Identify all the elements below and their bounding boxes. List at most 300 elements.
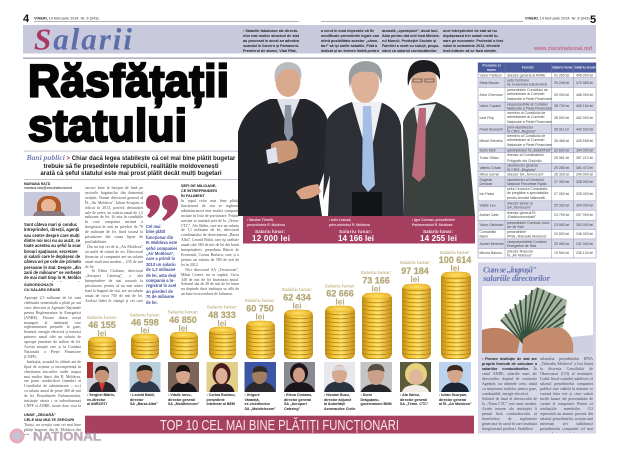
band teaser column 3: această „operațiune", două luni. bbox=[382, 29, 438, 33]
pull quote text: Cel mai bbox=[146, 224, 161, 229]
caption 3: • Vitalie Iurcu, bbox=[168, 393, 192, 397]
salary table: Naționale a Pieței Financiare bbox=[507, 143, 552, 147]
salary 46 155: 46 155 bbox=[88, 320, 116, 330]
salary 73 166: lei bbox=[372, 284, 380, 294]
salary 62 666 bbox=[325, 284, 356, 306]
salary 62 434: 62 434 bbox=[283, 292, 311, 302]
salary table: ÎS CRIS „Registru" bbox=[506, 130, 537, 134]
caption 2: SA „Barza Albă" bbox=[130, 402, 158, 406]
salary 73 166 bbox=[361, 270, 392, 294]
intro paragraph bbox=[24, 222, 81, 282]
date line left: VINERI, 14 februarie 2014. Nr. 6 (043) bbox=[34, 16, 99, 20]
panel: how salaries are fattened bbox=[478, 262, 596, 434]
portrait captions bbox=[87, 393, 472, 411]
deck: public money subhead bbox=[26, 153, 236, 177]
panel heading: salariile directorilor bbox=[482, 273, 551, 283]
salary 46 155: lei bbox=[98, 329, 106, 338]
salary table: vicepreședinte al Comisiei bbox=[507, 102, 548, 106]
salary table: Tudor Giltan bbox=[480, 156, 499, 160]
main title bbox=[28, 56, 229, 151]
pull quote text: R. Moldova este bbox=[146, 240, 177, 245]
salary 48 333: Salariu lunar: bbox=[207, 304, 238, 310]
crimson band with three leader salaries: • Iurie Leancă, bbox=[329, 218, 351, 222]
crimson band with three leader salaries: • Igor Corman, președintele bbox=[412, 218, 455, 222]
salary table: Salariu lunar bbox=[552, 66, 573, 70]
salary 46 598: Salariu lunar: bbox=[130, 312, 161, 318]
band teaser column 1: scandal în Guvern și Parlament. bbox=[243, 44, 299, 48]
salary table: Denizan bbox=[480, 182, 492, 186]
salary table: administrator ÎS „MoldATSA" bbox=[507, 149, 552, 153]
salary table: de pregătire a specialiștilor bbox=[507, 191, 549, 195]
band teaser column 2 bbox=[321, 29, 379, 53]
salary table: șefa Centrului bbox=[507, 78, 529, 82]
salary table: 465 164 lei bbox=[576, 104, 593, 108]
salary table: ice de Stat bbox=[507, 225, 524, 229]
salary table: vicedirector general bbox=[507, 164, 538, 168]
subhead: millionaire bosses: ÎN FALIMENT bbox=[181, 194, 205, 198]
caption 10: al ÎS „Air Moldova" bbox=[439, 402, 471, 406]
crimson band with three leader salaries bbox=[243, 216, 475, 244]
deck: public money subhead: Bani publici > Chiar dacă legea stabilește că cel mai bine plătit bugetar bbox=[27, 153, 235, 162]
portrait 8 bbox=[360, 362, 392, 392]
salary table: administrare al Comisiei bbox=[507, 138, 545, 142]
subhead: subordinates: CU SALARII GRASE bbox=[24, 288, 60, 292]
intro paragraph: Sunt câteva mari și conduc bbox=[24, 222, 77, 227]
salary 46 598 bbox=[130, 312, 161, 335]
salary table: 297 000 lei bbox=[576, 213, 593, 217]
salary table: 425 598 lei bbox=[576, 139, 593, 143]
band teaser column 2: modificate prevederile legale care bbox=[321, 34, 379, 38]
salary table: Naționale a Pieței Financiare bbox=[507, 97, 552, 101]
salary table: Sorin Stoli bbox=[480, 149, 496, 153]
coin stacks bbox=[88, 272, 471, 359]
portrait 6 bbox=[284, 362, 315, 392]
caption 5: Varaniță, bbox=[244, 398, 259, 402]
salary 46 155: Salariu lunar: bbox=[87, 315, 118, 321]
salary table: pentru Armata Națională bbox=[507, 196, 545, 200]
portrait 2 bbox=[130, 362, 160, 392]
salary table: Ion Pasla bbox=[480, 192, 494, 196]
salary table: Salariu anual bbox=[574, 66, 596, 70]
intro paragraph: birouri spațioase, secretare bbox=[24, 249, 77, 254]
salary table: director financiar bbox=[507, 249, 534, 253]
salary table: 394 000 lei bbox=[576, 149, 593, 153]
salary 46 598: 46 598 bbox=[131, 318, 159, 328]
page number left: 4 bbox=[23, 13, 30, 25]
salary table: 328 000 lei bbox=[576, 180, 593, 184]
pull quote text: funcționar din bbox=[146, 235, 173, 240]
bottom banner: TOP 10 CEL MAI BINE PLĂTIȚI FUNCȚIONARI bbox=[160, 417, 399, 434]
salary 62 666: lei bbox=[336, 298, 344, 306]
panel text column 1: • Fiecare instituție de stat are propria formulă de calculare a salariilor conducătorilor. În cazul ANRE, salariile mari ale directorilor depind de veniturile Agenției, iar ultimele cresc odată cu majorarea tarifelor pentru gaze, combustibil, energie electrică. bbox=[482, 356, 537, 396]
salary table: membru al Consiliului de bbox=[507, 134, 545, 138]
salary 62 434 bbox=[282, 287, 313, 310]
coin stack 1 bbox=[88, 336, 116, 359]
salary 100 614: Salariu lunar: bbox=[440, 250, 471, 256]
subhead: subordinates: SUBORDONAȚII bbox=[24, 283, 53, 287]
portrait 9 bbox=[400, 362, 431, 392]
caption 1: • Serghei Bătrîn, bbox=[87, 393, 115, 397]
salary table: 19 594 lei bbox=[554, 251, 569, 255]
crimson band with three leader salaries: 14 166 lei bbox=[338, 234, 374, 243]
caption 6: SA „Aeroport bbox=[284, 402, 307, 406]
salary 62 666: Salariu lunar: bbox=[325, 284, 356, 290]
salary 62 434: Salariu lunar: bbox=[282, 287, 313, 293]
salary 100 614: 100 614 bbox=[439, 255, 471, 265]
crimson band with three leader salaries: prim-ministrul R. Moldova bbox=[329, 223, 370, 227]
caption 5 bbox=[244, 393, 276, 411]
salary 60 750 bbox=[245, 298, 276, 322]
salary table: vicedirector al Centrului bbox=[507, 178, 544, 182]
crimson band with three leader salaries: Salariu lunar: bbox=[339, 229, 372, 234]
pull quote text: compania a în- bbox=[146, 278, 175, 283]
crimson band with three leader salaries: 14 255 lei bbox=[420, 234, 457, 243]
coin stack 8 bbox=[362, 292, 392, 359]
caption 9: • Ala Sârbu, bbox=[400, 393, 420, 397]
caption 4: Interimar al BEM bbox=[206, 402, 235, 406]
caption 10 bbox=[439, 393, 472, 406]
salary 46 850: Salariu lunar: bbox=[168, 310, 199, 316]
coin stack 9 bbox=[402, 284, 431, 359]
caption 5: • Grigore bbox=[244, 393, 260, 397]
panel heading: Cum se „îngrașă" bbox=[483, 264, 537, 274]
pull quote text: „Air Moldova", bbox=[146, 251, 175, 256]
salary table: Naționale a Pieței Financiare bbox=[507, 106, 552, 110]
coin stack 10 bbox=[441, 272, 471, 359]
pull quote text: bine plătit bbox=[146, 229, 165, 234]
salary 97 184 bbox=[400, 260, 431, 284]
salary 48 333 bbox=[207, 304, 238, 328]
salary table: 283 000 lei bbox=[576, 223, 593, 227]
caption 6 bbox=[284, 393, 312, 411]
coin stack 5 bbox=[246, 320, 275, 359]
salary table: ÎS CRIS „Registru" bbox=[506, 168, 537, 172]
portrait 1 bbox=[87, 362, 118, 392]
salary table: director general ÎS bbox=[507, 211, 536, 215]
photo: three state leaders bbox=[238, 60, 475, 216]
salary table: Stela Mocan bbox=[480, 81, 499, 85]
section name Salarii: Salarii bbox=[34, 22, 132, 56]
salary 100 614 bbox=[439, 250, 471, 273]
caption 8: • Dorin bbox=[360, 393, 372, 397]
salary 46 850: 46 850 bbox=[169, 315, 197, 325]
salary table: președintele Consiliului de bbox=[507, 88, 548, 92]
band teaser column 3: Familiei a venit cu soluții, propu- bbox=[382, 44, 439, 48]
salary table: 241 000 lei bbox=[576, 242, 593, 246]
salary 46 850 bbox=[168, 310, 199, 333]
band teaser column 4: depășească trei salarii medii lu- bbox=[443, 34, 499, 38]
salary table: Victor Parlicov bbox=[480, 73, 502, 77]
salary table: director SA „Termocom" bbox=[507, 173, 545, 177]
intro paragraph: dintre noi nici nu au auzit, ce bbox=[24, 238, 80, 243]
salary table: 351 473 lei bbox=[576, 166, 593, 170]
deck: public money subhead: trebuie să fie președintele republicii, realitățile moldovenești bbox=[43, 162, 219, 170]
subhead: where it flies: UNDE „ZBOARĂ" bbox=[24, 413, 56, 417]
caption 2: director bbox=[130, 398, 143, 402]
caption 4: • Corina Burlacu, bbox=[206, 393, 236, 397]
pull quote text: de lei. bbox=[146, 300, 158, 305]
band teaser column 2: oferă posibilitate acestor „cămo- bbox=[321, 39, 378, 43]
crimson band with three leader salaries: • Nicolae Timofti, bbox=[247, 218, 274, 222]
salary 62 666: 62 666 bbox=[326, 288, 354, 298]
salary table: administrare al Comisiei bbox=[507, 92, 545, 96]
salary 97 184: 97 184 bbox=[401, 266, 429, 276]
caption 7 bbox=[324, 393, 356, 411]
band teaser column 2: indicat și un termen limită pentru bbox=[321, 49, 379, 53]
pull quote text: șeful companiei bbox=[146, 246, 177, 251]
watermark logo bbox=[10, 428, 101, 444]
salary table: președintele Comisiei Jurid- bbox=[507, 221, 551, 225]
salary table: Artur Gherman bbox=[480, 93, 503, 97]
pull quote text: care a primit în bbox=[146, 256, 175, 261]
main title: statului bbox=[28, 100, 187, 151]
caption 7: • Nicolae Buzu, bbox=[324, 393, 350, 397]
salary table: 27 400 lei bbox=[554, 180, 569, 184]
band teaser column 3: nând ca salariul conducătorilor bbox=[382, 49, 437, 53]
salary 60 750: Salariu lunar: bbox=[245, 298, 276, 304]
band teaser column 3 bbox=[382, 29, 440, 53]
salary table: 39 248 lei bbox=[554, 81, 569, 85]
subhead: where it flies: CELE MAI MULTE ZEROURI bbox=[24, 418, 74, 422]
salary table: 340 000 lei bbox=[576, 173, 593, 177]
crimson band with three leader salaries: președintele R. Moldova bbox=[247, 223, 285, 227]
body text column 3: În topul celor mai bine plătiți funcționari de stat se regăsesc administratorii mai multor companii incluse în lista de privatizare. Printre acestea se numără șefa de la „Teton-CTC", Ala Sârbu, care are un salariu de 1,1 milioane de lei, directorul combinatului de divertisment „Barza Albă", Leonid Babii, care îşi atribuie anual câte 560 de mii de lei din banii întreprinderii, președinta Băncii de Economii, Corina Burlacu, care și a permis un salariu de 580 de mii de lei în 2012. bbox=[181, 199, 239, 267]
salary table: director tehnic al bbox=[507, 202, 533, 206]
caption 9 bbox=[400, 393, 428, 406]
portrait 3 bbox=[168, 362, 199, 392]
coin stack 4 bbox=[209, 326, 236, 359]
body text column 1 bbox=[24, 296, 81, 407]
salary table: Energetice de Stat bbox=[507, 244, 536, 248]
panel heading bbox=[482, 264, 551, 283]
salary table: Mihai Cernei bbox=[480, 173, 499, 177]
body text column 1: Aproape 2,5 milioane de lei sunt cheltuiala semestrială a plătit pe ani cinci directori ai Agenției Naționale pentru Reglementare în Energetică (ANRE). Fiecare dintre acești manageri al instituției care reglementează prețurile la gaze, benzină, energie electrică și termică primesc anual câte un salariu de aproape jumătate de milion de lei. Acesta situație este și la Comisia Națională a Pieței Financiare (CNPF). bbox=[24, 296, 81, 359]
salary table: Naționale a Pieței Financiare bbox=[507, 120, 552, 124]
salary 97 184: lei bbox=[411, 275, 419, 284]
caption 8 bbox=[360, 393, 392, 406]
subhead: millionaire bosses bbox=[180, 184, 217, 198]
author portrait bbox=[24, 192, 80, 216]
salary table: Național Frecvențe Radio bbox=[507, 182, 547, 186]
salary table: 20 083 lei bbox=[554, 242, 569, 246]
caption 9: SA „Teton- CTC" bbox=[400, 402, 428, 406]
salary table: Prenume și bbox=[482, 64, 501, 68]
salary table: Constantin bbox=[480, 230, 496, 234]
person: Nicolae Timofti bbox=[238, 62, 332, 216]
salary 73 166: Salariu lunar: bbox=[361, 270, 392, 276]
intro paragraph: și salarii care le depășesc de bbox=[24, 254, 80, 259]
salary table: 357 212 lei bbox=[576, 156, 593, 160]
salary table: 20 500 lei bbox=[554, 232, 569, 236]
caption 6: director general bbox=[284, 398, 311, 402]
subhead: millionaire bosses: CE ÎNTREPRINDERI bbox=[181, 189, 217, 193]
salary table: 462 000 lei bbox=[576, 116, 593, 120]
portrait 10 bbox=[439, 362, 471, 392]
salary 48 333: lei bbox=[218, 319, 226, 328]
salary table: 39 000 lei bbox=[554, 93, 569, 97]
intro paragraph: sau centre despre care mulți bbox=[24, 233, 80, 238]
salary table: SA „Termocom" bbox=[507, 206, 532, 210]
salary table: administrare al Comisiei bbox=[507, 115, 545, 119]
band teaser column 1: • Salariile fabuloase ale directo- bbox=[243, 29, 298, 33]
salary table: Iurie Filip bbox=[480, 116, 494, 120]
salary table: de Guvernare Electronică bbox=[507, 83, 547, 87]
salary table: 442 932 lei bbox=[576, 128, 593, 132]
salary table: 23 583 lei bbox=[554, 223, 569, 227]
salary 62 434: lei bbox=[293, 302, 301, 310]
author name bbox=[24, 182, 72, 190]
band teaser column 2: tari" să își umfle salariile. Filat a bbox=[321, 44, 377, 48]
salary table: 29 285 lei bbox=[554, 166, 569, 170]
band teaser column 4: unei întreprinderi de stat să nu bbox=[443, 29, 497, 33]
salary table: Poligrafic din Chișinău bbox=[507, 159, 542, 163]
band teaser column 4: nare pe economie. Proiectul a fost bbox=[443, 39, 503, 43]
subhead: millionaire bosses: ȘEFI DE MILIOANE, bbox=[181, 184, 216, 188]
deck: public money subhead: arată că șeful statului este mai prost plătit decât mulți bugetari bbox=[40, 170, 222, 177]
rule above deck bbox=[24, 150, 238, 153]
website address: www.ziarulnational.md bbox=[533, 46, 592, 52]
band teaser column 2: a cerut în mod imperativ să fie bbox=[321, 29, 374, 33]
salary table: 36 911 lei bbox=[554, 128, 569, 132]
salary table: Vasile Leu bbox=[480, 204, 496, 208]
salary table: 468 000 lei bbox=[576, 93, 593, 97]
salary table: președintele bbox=[507, 230, 526, 234]
intro paragraph: câteva ori pe cele ale primelor bbox=[24, 259, 81, 264]
caption 5: ex-vicedirector bbox=[244, 402, 270, 406]
pull quote text: de 1,2 milioane bbox=[146, 267, 175, 272]
band teaser column 3: rul Muncii, Protecției Sociale și bbox=[382, 39, 436, 43]
subhead: where it flies bbox=[24, 412, 74, 422]
band teaser column 4 bbox=[443, 29, 503, 53]
author name: MARIANA RAȚĂ bbox=[24, 182, 50, 186]
salary table: Eugeniu bbox=[480, 178, 492, 182]
salary table: 32 833 lei bbox=[554, 149, 569, 153]
caption 9: director general bbox=[400, 398, 427, 402]
caption 5: SA „Moldtelecom" bbox=[244, 407, 276, 411]
caption 10: • Iulian Scorpan, bbox=[439, 393, 467, 397]
portrait 5 bbox=[244, 362, 276, 392]
salary table: 35 466 lei bbox=[554, 139, 569, 143]
salary table: nume bbox=[487, 68, 496, 72]
person: Igor Corman bbox=[403, 60, 475, 216]
salary table: membru al Consiliului de bbox=[507, 111, 545, 115]
salary table: Victor Captari bbox=[480, 104, 501, 108]
salary table: 24 750 lei bbox=[554, 213, 569, 217]
pull quote text: an pierderi de bbox=[146, 289, 173, 294]
salary table: Valeriu Crican bbox=[480, 166, 501, 170]
salary 48 333: 48 333 bbox=[208, 310, 236, 320]
salary table: 41 250 lei bbox=[554, 73, 569, 77]
salary table: director al Combinatului bbox=[507, 153, 544, 157]
watermark logo: NATIONAL bbox=[33, 430, 101, 444]
salary table: 38 730 lei bbox=[554, 104, 569, 108]
caption 1: ex-director bbox=[87, 398, 106, 402]
pull quote text: de lei, asta deși bbox=[146, 273, 176, 278]
salary table: director general al ANRE bbox=[507, 73, 546, 77]
salary table: 27 050 lei bbox=[554, 192, 569, 196]
caption 3 bbox=[168, 393, 200, 406]
crimson band with three leader salaries: Salariu lunar: bbox=[423, 229, 453, 234]
caption 1: al ANRCETI bbox=[87, 402, 107, 406]
caption 8: Drăguțanu, bbox=[360, 398, 379, 402]
caption 3: director general bbox=[168, 398, 195, 402]
pull quote text: 2013 un salariu bbox=[146, 262, 176, 267]
caption 1 bbox=[87, 393, 115, 406]
portrait photos bbox=[87, 362, 471, 392]
band teaser column 3: Abia pentru dat unii însă Ministe- bbox=[382, 34, 440, 38]
caption 2 bbox=[130, 393, 158, 406]
coin stack 2 bbox=[131, 334, 159, 359]
salary table: 25 333 lei bbox=[554, 204, 569, 208]
salary 97 184: Salariu lunar: bbox=[400, 260, 431, 266]
salary table: Mihail Oilenbru bbox=[480, 139, 503, 143]
caption 7: director adjunct bbox=[324, 398, 351, 402]
salary table: 38 500 lei bbox=[554, 116, 569, 120]
caption 7: al Autorității bbox=[324, 402, 345, 406]
author name: mariana.rata@ziarulnational.md bbox=[24, 186, 72, 190]
salary 46 598: lei bbox=[141, 326, 149, 335]
body text column 2 bbox=[85, 186, 143, 304]
band teaser column 1: Premierul de atunci, Vlad Filat, bbox=[243, 49, 297, 53]
salary table: IPNA „Teleradio Moldova" bbox=[507, 234, 548, 238]
coin stack 7 bbox=[325, 306, 355, 359]
band teaser column 4: votat în octombrie 2013, efectele bbox=[443, 44, 500, 48]
photo: hands holding banknotes bbox=[482, 286, 593, 353]
salary table: 246 000 lei bbox=[576, 232, 593, 236]
page number right: 5 bbox=[590, 14, 596, 26]
salary 73 166: 73 166 bbox=[362, 276, 390, 286]
pull quote mark bbox=[146, 195, 178, 221]
date line right: VINERI, 14 februarie 2014. Nr. 6 (043) bbox=[525, 16, 590, 20]
main title: Răsfățații bbox=[28, 56, 229, 106]
pull quote text: registrat în acel bbox=[146, 283, 176, 288]
lavender header band bbox=[23, 25, 596, 54]
caption 6: Catering" bbox=[284, 407, 300, 411]
salary 60 750: lei bbox=[256, 312, 264, 322]
salary labels above stacks bbox=[87, 250, 471, 338]
caption 8: guvernatorul BNM bbox=[360, 402, 392, 406]
caption 7: Aeronautice Civile bbox=[324, 407, 355, 411]
crimson band with three leader salaries: 12 000 lei bbox=[252, 234, 290, 243]
salary table: Adrian Calis bbox=[480, 213, 499, 217]
salary table: 29 961 lei bbox=[554, 156, 569, 160]
coin stack 3 bbox=[170, 332, 198, 359]
salary table: șeful Centrului Consultativ bbox=[507, 187, 548, 191]
salary table: vicepreședintele Comisiei bbox=[507, 240, 547, 244]
band teaser column 4: însă întârzie să se facă simțite. bbox=[443, 49, 497, 53]
pull quote text bbox=[146, 224, 177, 305]
salary 46 850: lei bbox=[179, 324, 187, 333]
band teaser column 1: rilor mai multor structuri de stat bbox=[243, 34, 299, 38]
salary table: ÎS „Air Moldova" bbox=[506, 254, 533, 258]
pull quote text: 70 de milioane bbox=[146, 294, 174, 299]
salary 60 750: 60 750 bbox=[246, 304, 274, 314]
portrait 7 bbox=[324, 362, 355, 392]
caption 4: președinte bbox=[206, 398, 225, 402]
salary table: Andrei Șeremei bbox=[480, 242, 504, 246]
salary table: 495 000 lei bbox=[576, 73, 593, 77]
salary table: 28 333 lei bbox=[554, 173, 569, 177]
body text column 2: sarcuri între la început de lună pe sectorile bugetarilor din domeniul aviației. Numai directorul general al ÎS „Air Moldova", Iulian Scorpan, a ridicat în 2013, potrivit declarației sale de avere, un salariu anual de 1,2 milioane de lei. Și asta în condițiile în care compania aeriană a înregistrat în anii au pierderi de 70 de milioane de lei, fiind scoasă la privatizare din cauza lipsei de profitabilitate. bbox=[85, 186, 143, 244]
salary table: 470 983 lei bbox=[576, 81, 593, 85]
salary table: 235 134 lei bbox=[576, 251, 593, 255]
salary table: 325 000 lei bbox=[576, 192, 593, 196]
crimson band with three leader salaries: Salariu lunar: bbox=[255, 229, 285, 234]
crimson band with three leader salaries: Parlamentului R. Moldova bbox=[412, 223, 452, 227]
coin stack 6 bbox=[284, 310, 313, 359]
caption 3: SA „Moldtelecom" bbox=[168, 402, 199, 406]
salary 46 155 bbox=[87, 315, 118, 338]
